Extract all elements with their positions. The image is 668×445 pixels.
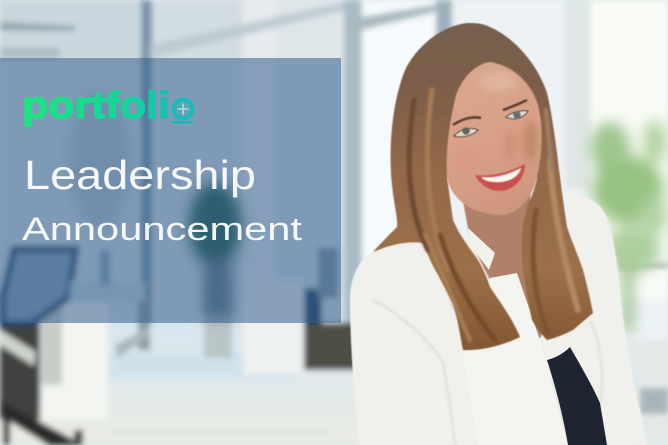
translucent blue panel (0, 58, 341, 323)
smile (475, 164, 525, 191)
subheading: Announcement: Announcement (22, 211, 302, 247)
hair strands (409, 90, 578, 340)
face shading (455, 72, 537, 174)
floor reflections (110, 352, 300, 378)
hair (373, 23, 593, 350)
sofa (304, 323, 360, 370)
pillars (204, 280, 232, 358)
face (447, 62, 542, 215)
portrait of woman (350, 23, 648, 445)
heading: Leadership: Leadership (24, 152, 256, 198)
dark top (547, 347, 607, 445)
blurred plants (68, 90, 667, 332)
neck and chest (462, 190, 542, 345)
chair (0, 323, 40, 420)
cabinet (42, 285, 108, 420)
white jacket (350, 193, 648, 445)
jacket lapel (462, 273, 568, 445)
shelf (70, 282, 145, 302)
blouse collar (468, 228, 495, 270)
logo: portfolio: portfoli (22, 85, 170, 127)
eyes and brows (453, 100, 528, 137)
icon: circled plus letter o (172, 100, 193, 124)
jacket seams (372, 300, 602, 445)
